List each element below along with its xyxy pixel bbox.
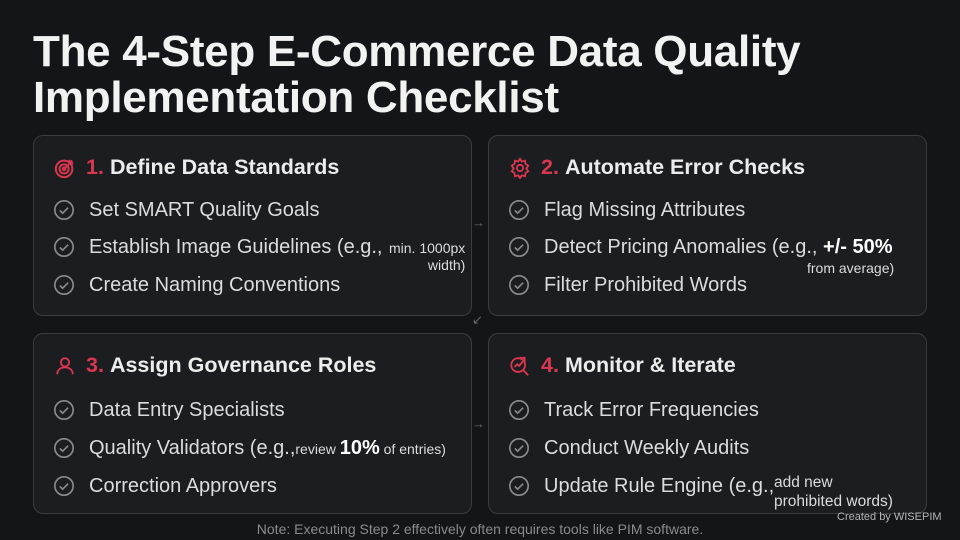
panel: step 3: Data Entry Specialists: [89, 399, 285, 421]
title: Implementation Checklist: [33, 73, 559, 122]
footnote: Note: Executing Step 2 effectively often requires tools like PIM software.: [257, 521, 703, 537]
item: [509, 236, 892, 258]
sub note: [389, 240, 465, 273]
panel: step 3: Correction Approvers: [89, 475, 277, 497]
item: [509, 475, 774, 497]
heading: step 1: Define Data Standards: [110, 155, 339, 179]
item: [54, 236, 382, 258]
panel: step 2: Detect Pricing Anomalies (e.g., +/- 50%: [544, 236, 892, 258]
sub note: [774, 474, 893, 510]
item: [509, 199, 745, 221]
heading: step 1: 1.: [86, 155, 104, 179]
item: [54, 199, 319, 221]
item: [54, 437, 446, 459]
heading: step 4: 4.: [541, 353, 559, 377]
credit: Created by WISEPIM: [837, 511, 942, 523]
item: [509, 399, 759, 421]
sub note: width): [428, 257, 465, 273]
item: [54, 475, 277, 497]
panel: step 4: Track Error Frequencies: [544, 399, 759, 421]
panel: step 4: Conduct Weekly Audits: [544, 437, 749, 459]
panel: step 3: Quality Validators (e.g.,review 10% of entries): [89, 437, 446, 459]
sub note: add new: [774, 474, 833, 491]
sub note: min. 1000px: [389, 240, 465, 256]
panel: step 4: [488, 333, 927, 514]
panel: step 1: Create Naming Conventions: [89, 274, 340, 296]
heading: step 3: 3.: [86, 353, 104, 377]
arrow: ↙: [472, 312, 483, 327]
panel: step 4: Update Rule Engine (e.g.,: [544, 475, 774, 497]
title: [33, 27, 800, 122]
panel: step 2: [488, 135, 927, 316]
sub note: from average): [807, 260, 894, 276]
panel: step 3: [33, 333, 472, 514]
panel: step 1: Establish Image Guidelines (e.g.,: [89, 236, 382, 258]
arrow: →: [472, 215, 485, 230]
heading: step 2: 2.: [541, 155, 559, 179]
sub note: prohibited words): [774, 493, 893, 510]
item: [509, 274, 747, 296]
heading: step 3: Assign Governance Roles: [110, 353, 376, 377]
panel: step 1: [33, 135, 472, 316]
heading: step 2: Automate Error Checks: [565, 155, 805, 179]
heading: step 4: Monitor & Iterate: [565, 353, 736, 377]
title: The 4-Step E-Commerce Data Quality: [33, 27, 800, 76]
item: [509, 437, 749, 459]
panel: step 2: Filter Prohibited Words: [544, 274, 747, 296]
item: [54, 399, 285, 421]
arrow: →: [472, 416, 485, 431]
item: [54, 274, 340, 296]
panel: step 1: Set SMART Quality Goals: [89, 199, 319, 221]
panel: step 2: Flag Missing Attributes: [544, 199, 745, 221]
